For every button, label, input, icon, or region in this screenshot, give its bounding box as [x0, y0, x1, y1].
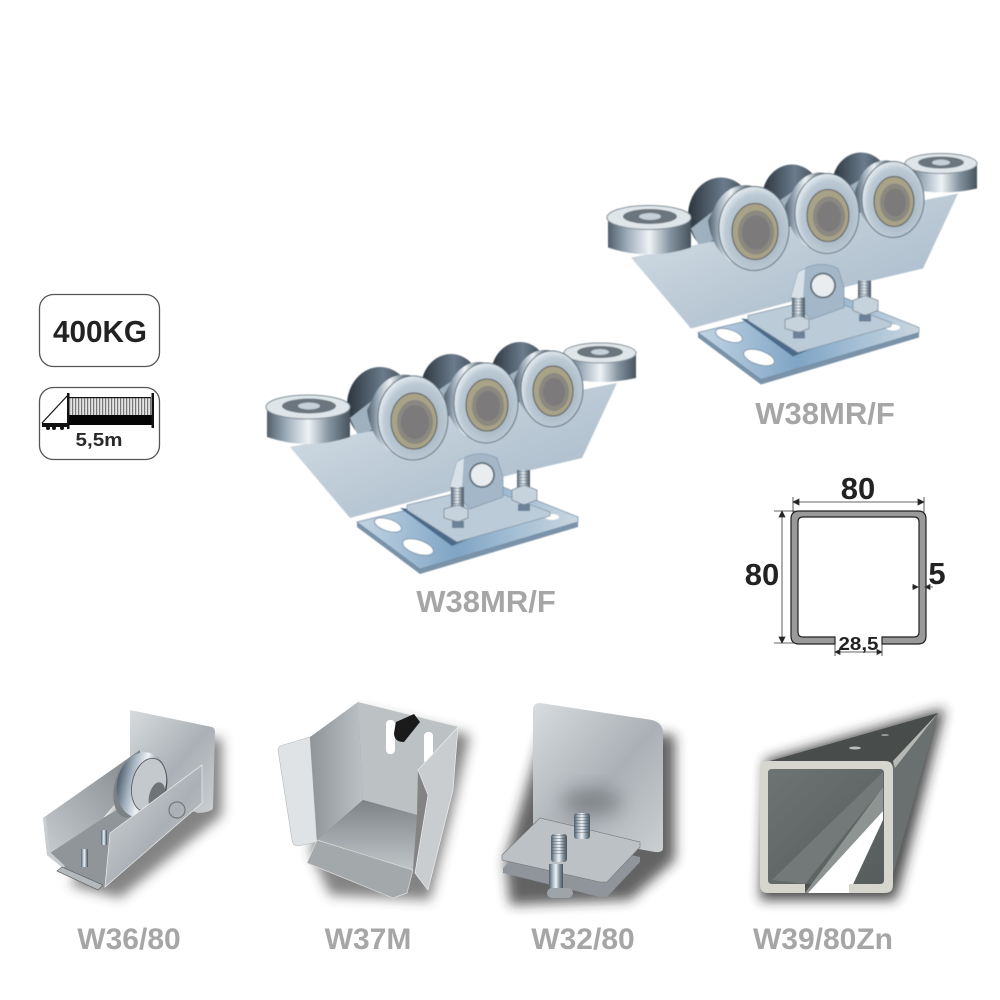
channel floor	[47, 790, 160, 887]
label W38MR/F upper: W38MR/F	[755, 396, 895, 431]
badge: gate length 5,5m: 5,5m	[76, 430, 122, 450]
shadow	[310, 710, 470, 900]
front frame	[760, 761, 893, 893]
plate dark reflection	[562, 788, 622, 816]
profile cross-section diagram: 5	[928, 556, 946, 591]
badge: 400KG load: 400KG	[53, 314, 147, 349]
wheel 1	[367, 375, 448, 460]
channel inner wall	[43, 750, 140, 855]
product W37M end cap	[278, 702, 470, 900]
label W37M: W37M	[325, 923, 411, 956]
product W36/80 end stop with wheel	[43, 710, 222, 898]
label W39/80Zn: W39/80Zn	[753, 923, 893, 956]
wheel	[108, 748, 173, 822]
badge: gate length 5,5m	[40, 388, 160, 460]
product W39/80Zn rail	[760, 708, 945, 900]
label W36/80: W36/80	[77, 923, 181, 956]
front lip	[307, 840, 413, 898]
back plate	[130, 710, 215, 813]
label W38MR/F lower: W38MR/F	[416, 584, 556, 619]
wheel 2	[444, 362, 518, 443]
threaded studs	[551, 813, 590, 862]
lip side	[805, 787, 883, 893]
centre bolt	[547, 864, 573, 898]
side roller right	[564, 343, 636, 382]
base plate	[357, 487, 578, 574]
dimension text: 80	[841, 471, 875, 506]
top clamp plate	[407, 487, 550, 542]
shadow	[505, 725, 675, 905]
main side plate	[290, 383, 617, 518]
back wheels	[347, 342, 549, 443]
profile cross-section diagram: 80	[745, 557, 779, 592]
profile cross-section diagram: 28,5	[838, 634, 878, 654]
right flange	[415, 727, 458, 890]
studs	[81, 830, 107, 867]
bolts and nuts	[444, 470, 537, 528]
right side face	[888, 713, 938, 893]
inner cavity	[768, 769, 884, 884]
upper clamp plate	[502, 818, 640, 882]
side roller left	[266, 395, 350, 444]
dimension lines	[774, 497, 933, 656]
front wall	[105, 765, 202, 887]
inner lip	[772, 772, 883, 884]
wheel 3	[514, 350, 583, 427]
label W32/80: W32/80	[531, 923, 635, 956]
left inner wall	[310, 702, 363, 840]
pivot bracket	[450, 454, 503, 509]
carriage W38MR/F lower	[266, 342, 636, 574]
slots and black roller	[386, 714, 433, 764]
profile cross-section diagram	[745, 471, 946, 656]
left edge	[43, 817, 65, 868]
badge: 400KG load	[40, 294, 160, 366]
carriage W38MR/F upper	[607, 152, 977, 384]
floor	[317, 800, 417, 870]
upright plate	[533, 703, 663, 852]
highlight edge	[893, 713, 938, 768]
profile outline	[791, 511, 926, 644]
lower clamp plate	[503, 835, 640, 897]
back wall	[358, 702, 458, 815]
product W32/80 bracket plate	[502, 703, 675, 905]
top face	[770, 713, 938, 761]
shadow	[70, 738, 222, 898]
slot opening	[808, 811, 883, 893]
lower clamp	[57, 867, 103, 890]
shadow	[760, 708, 945, 900]
left flange	[278, 737, 317, 846]
